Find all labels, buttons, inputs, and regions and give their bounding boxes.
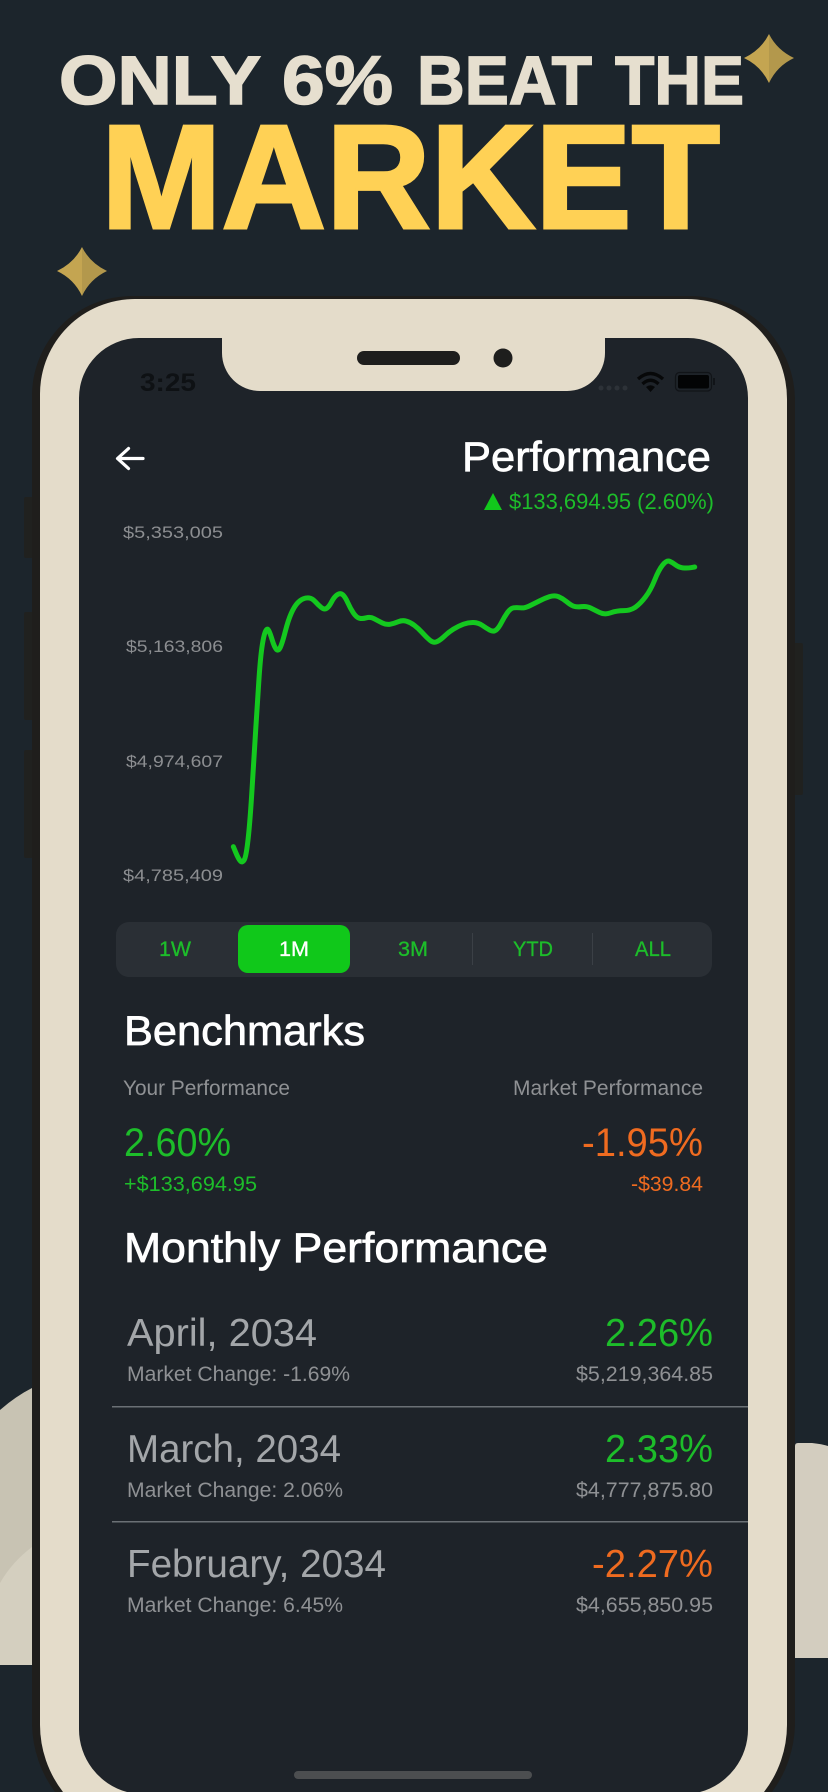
range labels: 3M [398,938,428,961]
selected range pill [238,925,350,973]
benchmark: market performance: Market Performance [513,1077,703,1100]
monthly row: March: $4,777,875.80 [576,1479,713,1502]
phone screen [79,338,748,1792]
monthly row: March: Market Change: 2.06% [127,1479,343,1502]
performance change [484,489,714,514]
headline line one: 6% [282,42,393,119]
monthly row: February: $4,655,850.95 [576,1594,713,1617]
monthly row: April: 2.26% [605,1312,713,1355]
time range selector [116,922,712,977]
icon: wifi [638,374,663,392]
monthly row: April: April, 2034 [127,1312,317,1355]
monthly row: March: 2.33% [605,1428,713,1471]
title [59,42,744,260]
benchmark: your performance: 2.60% [124,1121,231,1165]
benchmark: your performance: Your Performance [123,1077,290,1100]
monthly row: March: March, 2034 [127,1428,341,1471]
heading: Monthly Performance: Monthly Performance [124,1224,548,1271]
line chart [123,523,695,885]
phone side buttons [24,497,803,858]
icon: gold sparkle top right [744,34,794,83]
status bar [140,369,715,397]
range labels [159,938,671,961]
chart y axis labels: $5,163,806 [126,637,223,656]
signal dots [598,386,628,390]
phone cream frame [40,299,787,1792]
back arrow [118,448,143,468]
range labels: YTD [513,938,553,961]
status time: 3:25 [140,369,196,397]
monthly row: February: -2.27% [592,1543,713,1586]
notch [222,336,605,391]
benchmark: your performance: +$133,694.95 [124,1173,257,1196]
headline line two: MARKET [101,95,720,260]
decorative shape: bottom right [795,1443,828,1658]
chart y axis labels: $5,353,005 [123,523,223,542]
notch camera [494,348,512,368]
chart y axis labels [123,523,223,885]
benchmark: market performance: -1.95% [582,1121,703,1165]
chart y axis labels: $4,785,409 [123,866,223,885]
benchmark: your performance [123,1077,290,1196]
benchmark: market performance [513,1077,703,1196]
range labels: 1M [279,938,309,961]
monthly row: March [127,1428,713,1502]
icon: gold sparkle left [57,247,107,296]
headline line one: ONLY [59,42,261,119]
range labels: ALL [635,938,671,961]
monthly row: February: February, 2034 [127,1543,386,1586]
selector track [116,922,712,977]
icon: battery [676,372,715,391]
heading: Benchmarks: Benchmarks [124,1007,365,1054]
headline line one: BEAT [417,42,592,119]
headline line one [59,42,744,119]
benchmark: market performance: -$39.84 [631,1173,703,1196]
change value: $133,694.95 (2.60%) [509,489,714,514]
phone dark outline [32,296,795,1792]
headline line one: THE [615,42,744,119]
heading: Performance: Performance [462,433,711,480]
icon: up triangle [484,493,502,510]
monthly row: April: $5,219,364.85 [576,1363,713,1386]
monthly row: February: Market Change: 6.45% [127,1594,343,1617]
range labels: 1W [159,938,191,961]
home indicator [294,1771,532,1779]
decorative shape: bottom left [0,1388,32,1665]
monthly row: April [127,1312,713,1386]
monthly row: February [127,1543,713,1617]
monthly row: April: Market Change: -1.69% [127,1363,350,1386]
notch speaker [357,351,460,365]
chart y axis labels: $4,974,607 [126,752,223,771]
chart line [233,561,695,862]
